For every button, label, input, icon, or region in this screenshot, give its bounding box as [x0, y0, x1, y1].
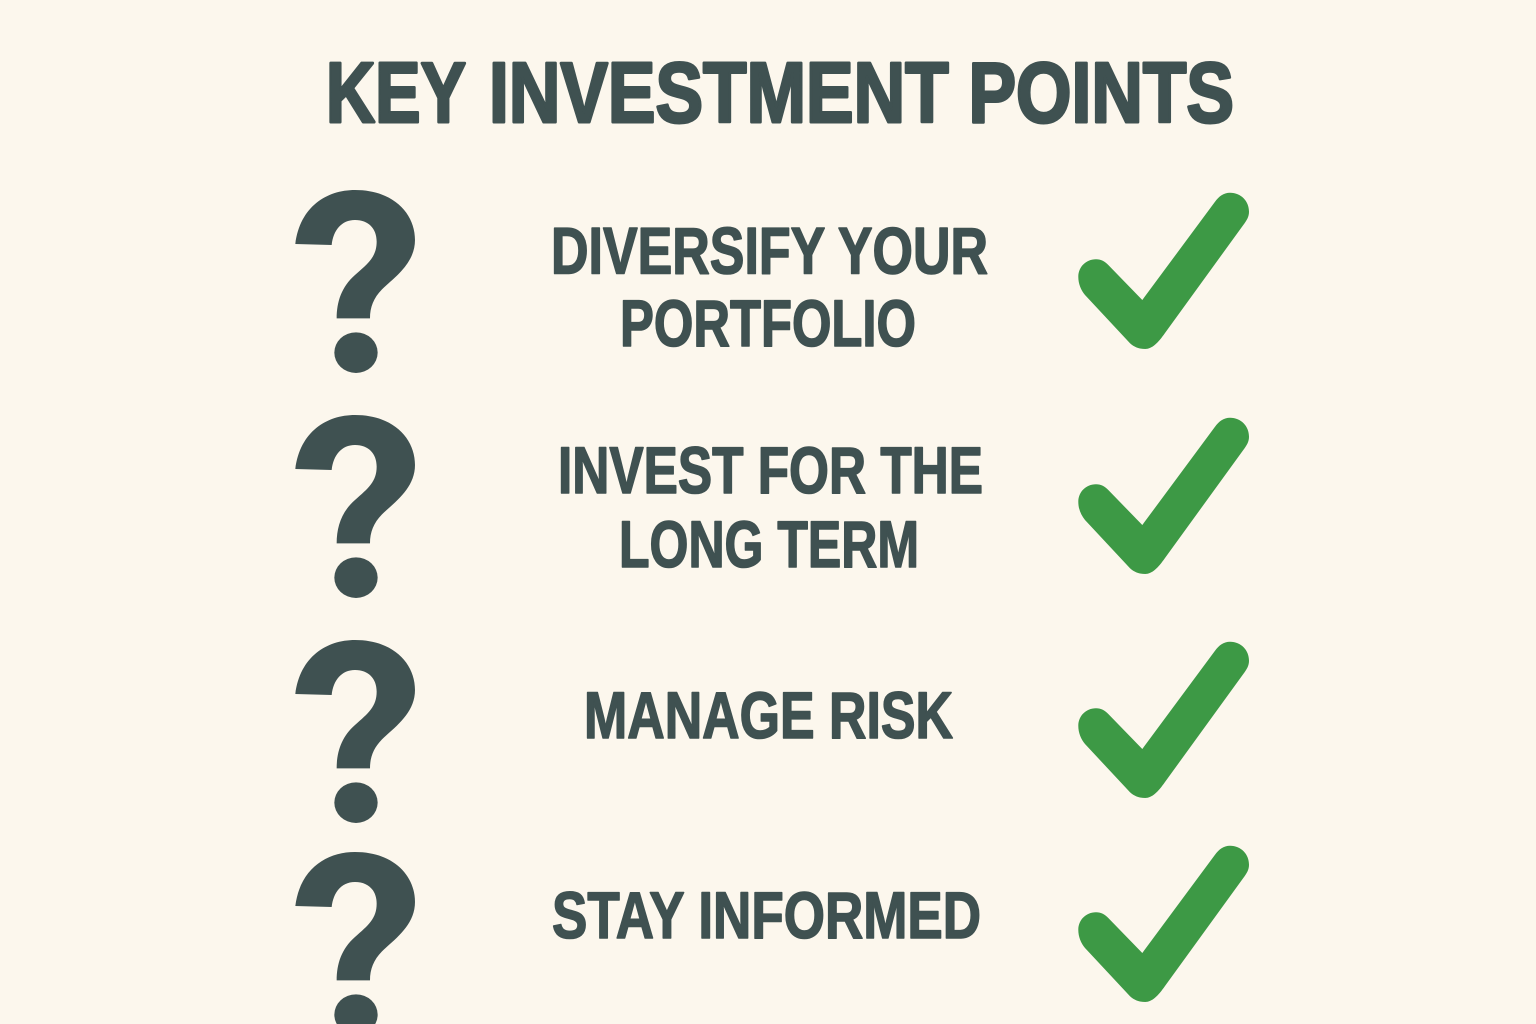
- label: invest for the long term: LONG TERM: [619, 507, 919, 581]
- icon: check mark 2: [1078, 418, 1249, 574]
- label: diversify your portfolio: PORTFOLIO: [620, 286, 916, 360]
- icon: question mark 4: [295, 852, 415, 1024]
- icon: check mark 1: [1078, 193, 1249, 349]
- icon: check mark 4: [1078, 846, 1249, 1002]
- label: invest for the long term: [558, 433, 983, 581]
- row 2: invest for the long term: [295, 415, 1249, 598]
- icon: check mark 3: [1078, 642, 1249, 798]
- label: invest for the long term: INVEST FOR THE: [558, 433, 983, 507]
- title: INVESTMENT POINTS: [489, 46, 1234, 141]
- icon: question mark 3: [295, 640, 415, 823]
- label: stay informed: STAY INFORMED: [552, 878, 981, 952]
- row 4: stay informed: [295, 846, 1249, 1024]
- row 3: manage risk: [295, 640, 1249, 823]
- icon: question mark 2: [295, 415, 415, 598]
- title: KEY: [326, 46, 466, 141]
- label: diversify your portfolio: DIVERSIFY YOUR: [551, 214, 988, 288]
- row 1: diversify your portfolio: [295, 190, 1249, 373]
- label: manage risk: MANAGE RISK: [584, 678, 953, 752]
- label: diversify your portfolio: [551, 214, 988, 360]
- icon: question mark 1: [295, 190, 415, 373]
